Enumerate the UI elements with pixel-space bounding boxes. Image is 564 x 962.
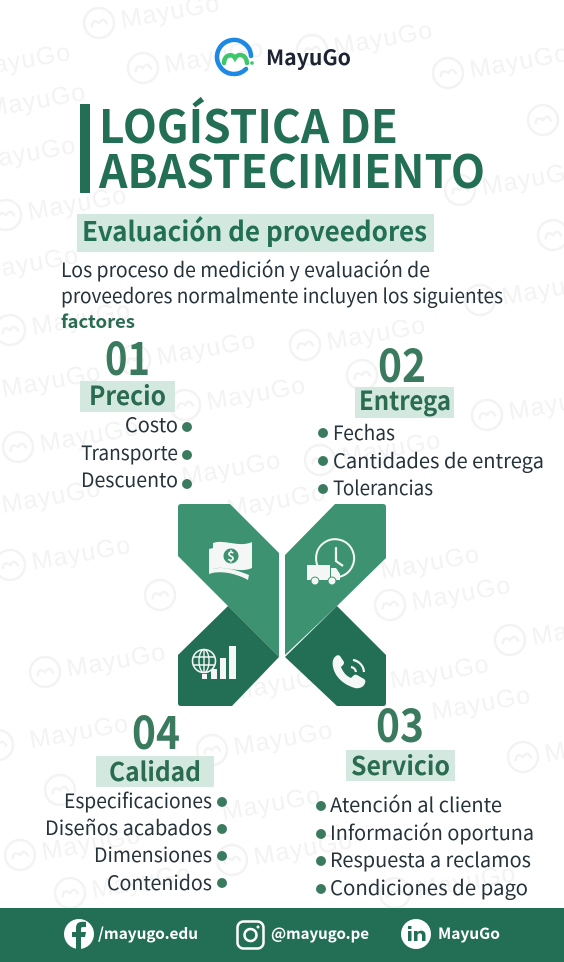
panel: 03 servicio: 03 <box>376 690 424 756</box>
watermark pattern: MayuGo <box>89 859 193 904</box>
watermark pattern: MayuGo <box>324 311 428 356</box>
watermark pattern: MayuGo <box>378 540 482 585</box>
subtitle: Evaluación de proveedores <box>82 210 427 249</box>
watermark pattern: MayuGo <box>64 638 168 683</box>
watermark pattern: MayuGo <box>388 650 492 695</box>
panel: 02 entrega: Cantidades de entrega <box>333 445 544 474</box>
panel: 01 precio: Costo <box>125 409 178 438</box>
watermark pattern: MayuGo <box>0 358 103 403</box>
panel: 03 servicio: Atención al cliente <box>330 789 502 818</box>
intro paragraph: proveedores normalmente incluyen los siguientes <box>61 280 503 309</box>
panel: 02 entrega: Fechas <box>333 417 395 446</box>
panel: 04 calidad: 04 <box>132 697 180 763</box>
intro paragraph <box>61 254 503 334</box>
panel: 04 calidad: Especificaciones <box>64 785 212 814</box>
watermark pattern: MayuGo <box>154 326 258 371</box>
icon: logo ring <box>217 40 254 74</box>
panel: 02 entrega: Entrega <box>359 381 451 418</box>
watermark pattern: MayuGo <box>219 781 323 826</box>
segment: price light <box>178 504 279 657</box>
watermark pattern: MayuGo <box>27 709 131 754</box>
panel: 01 precio: Precio <box>89 376 166 413</box>
icon: linkedin <box>401 919 431 949</box>
intro paragraph: Los proceso de medición y evaluación de <box>61 254 430 283</box>
icon: globe and bars <box>192 646 236 679</box>
brand logo <box>217 40 351 74</box>
title <box>80 91 485 202</box>
icon: clock and truck <box>307 539 354 585</box>
panel: 03 servicio: Información oportuna <box>330 817 534 846</box>
segment: service dark <box>285 606 386 706</box>
panel: 04 calidad: Contenidos <box>107 867 212 896</box>
panel: 04 calidad: Dimensiones <box>94 839 212 868</box>
icon: facebook <box>64 919 94 949</box>
watermark pattern: MayuGo <box>224 478 328 523</box>
intro paragraph: factores <box>61 308 135 334</box>
central X diagram <box>178 504 386 706</box>
panel: 01 precio: 01 <box>105 323 150 389</box>
panel: 04 calidad <box>45 697 227 896</box>
icon: phone <box>333 655 365 688</box>
panel: 04 calidad: Diseños acabados <box>45 812 212 841</box>
segment: delivery light <box>285 504 386 655</box>
panel: 03 servicio: Condiciones de pago <box>330 872 528 901</box>
watermark pattern: MayuGo <box>339 426 443 471</box>
watermark pattern: MayuGo <box>409 571 513 616</box>
watermark pattern: MayuGo <box>29 296 133 341</box>
facebook handle: /mayugo.edu <box>98 922 198 944</box>
title: LOGÍSTICA DE <box>99 91 398 157</box>
watermark pattern: MayuGo <box>25 181 129 226</box>
segment: quality dark <box>178 606 279 706</box>
watermark pattern: MayuGo <box>331 16 435 61</box>
panel: 02 entrega: Tolerancias <box>333 472 433 501</box>
panel: 02 entrega: 02 <box>378 330 426 396</box>
watermark pattern: MayuGo <box>204 371 308 416</box>
watermark pattern: MayuGo <box>179 446 283 491</box>
icon: instagram <box>238 922 264 948</box>
brand name: MayuGo <box>266 42 351 72</box>
watermark pattern: MayuGo <box>429 681 533 726</box>
panel: 01 precio: Descuento <box>81 464 178 493</box>
watermark pattern: MayuGo <box>251 826 355 871</box>
watermark pattern: MayuGo <box>414 859 518 904</box>
watermark pattern: MayuGo <box>231 716 335 761</box>
watermark pattern: MayuGo <box>29 531 133 576</box>
panel: 03 servicio <box>316 690 534 901</box>
instagram handle: @mayugo.pe <box>271 922 369 944</box>
panel: 03 servicio: Respuesta a reclamos <box>330 844 531 873</box>
panel: 01 precio: Transporte <box>81 437 178 466</box>
panel: 01 precio <box>80 323 192 493</box>
icon: money bills <box>209 542 252 580</box>
panel: 03 servicio: Servicio <box>351 746 450 783</box>
watermark pattern: MayuGo <box>0 474 103 519</box>
linkedin handle: MayuGo <box>438 922 500 944</box>
title: ABASTECIMIENTO <box>98 136 485 202</box>
panel: 04 calidad: Calidad <box>109 752 201 789</box>
icon: money bills: $ <box>227 546 235 565</box>
watermark pattern: MayuGo <box>162 34 266 79</box>
watermark pattern: MayuGo <box>39 821 143 866</box>
panel: 02 entrega <box>318 330 544 501</box>
watermark pattern: MayuGo <box>229 661 333 706</box>
footer bar <box>0 908 564 962</box>
watermark pattern: MayuGo <box>37 413 141 458</box>
